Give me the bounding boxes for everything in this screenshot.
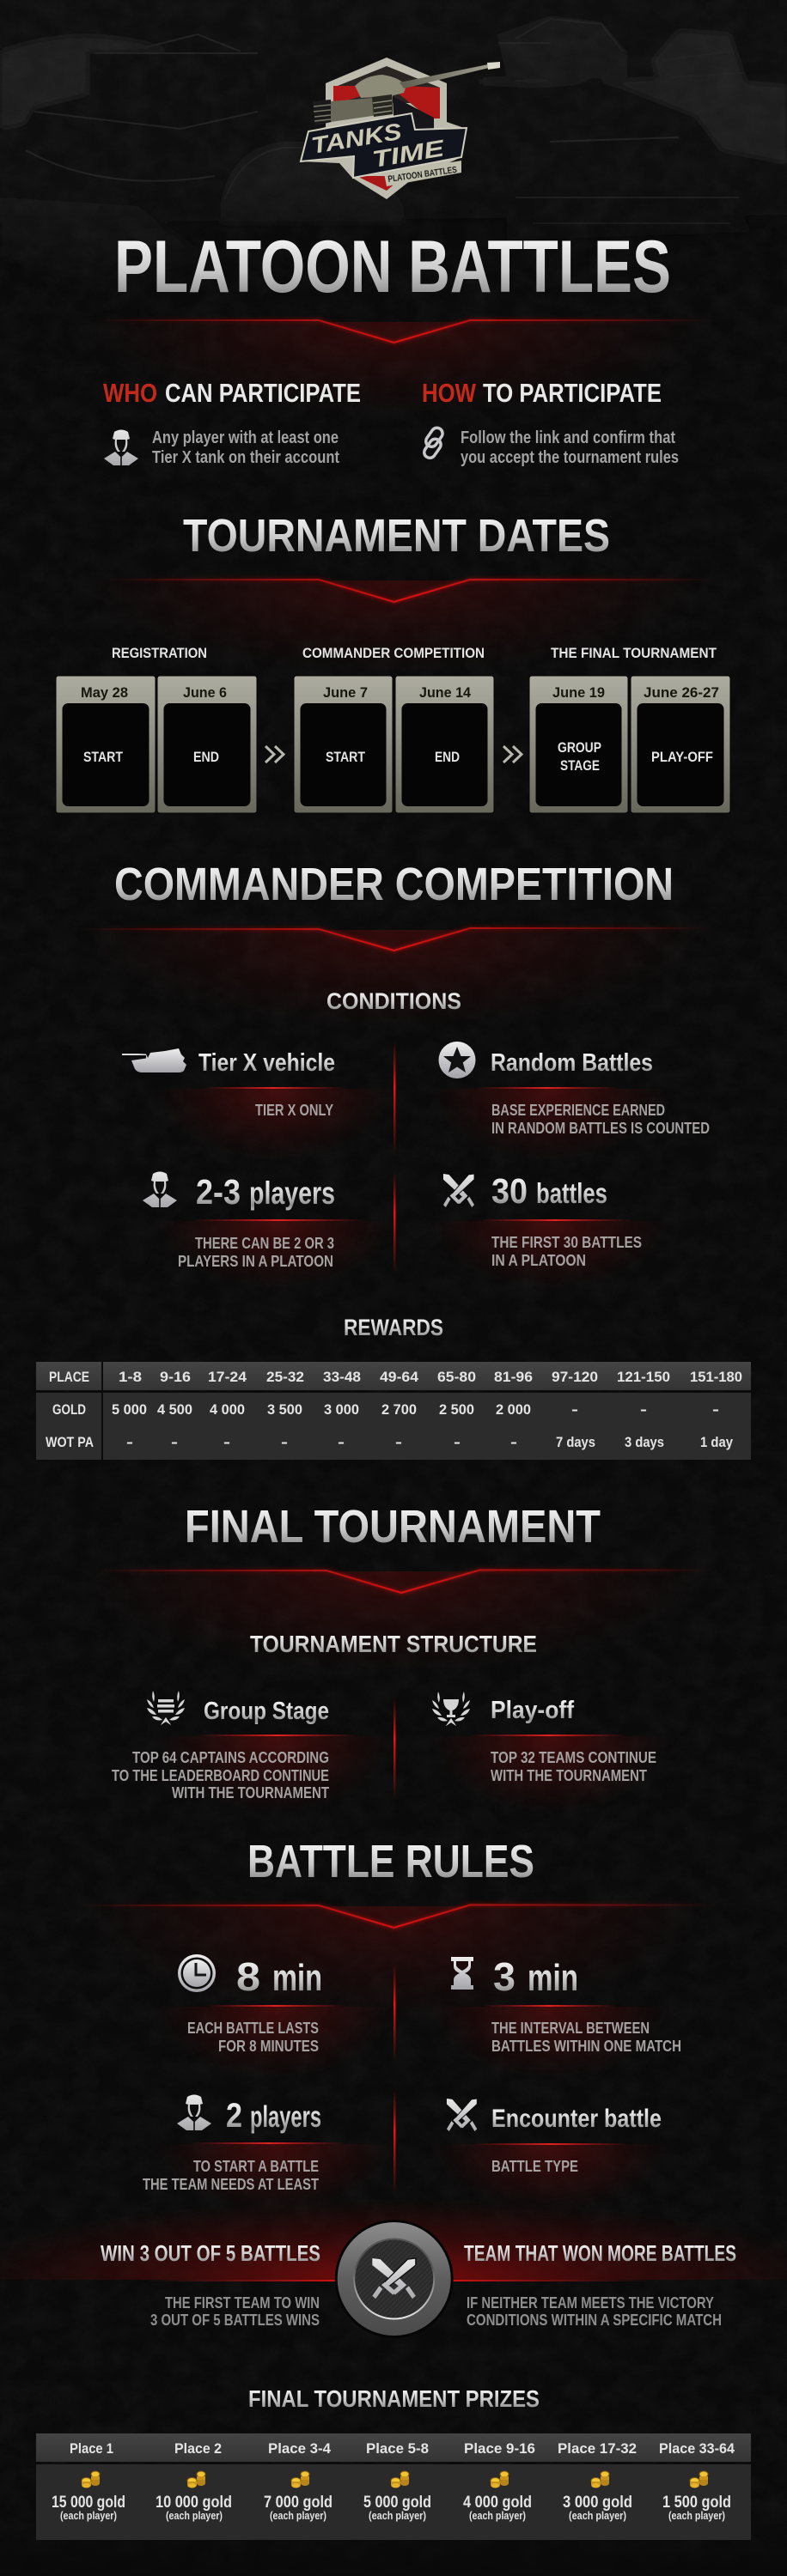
table header: Place 5-8	[366, 2440, 429, 2457]
description: THE FIRST 30 BATTLES	[491, 1234, 642, 1251]
description: BATTLES WITHIN ONE MATCH	[491, 2038, 681, 2055]
heading: Random Battles	[491, 1049, 653, 1077]
card: June 6 end: END	[193, 749, 219, 765]
table row: place: 81-96	[494, 1369, 533, 1385]
table row: wot pa: -	[338, 1434, 345, 1450]
heading: 3	[493, 1954, 516, 1999]
card: May 28 start: May 28	[81, 684, 128, 701]
heading: 30	[491, 1171, 528, 1211]
heading: tournament dates: TOURNAMENT DATES	[183, 510, 610, 562]
table row: place: 121-150	[617, 1369, 670, 1385]
prize: place 17-32: 3 000 gold	[563, 2494, 632, 2512]
heading	[226, 2097, 321, 2135]
vertical divider: tournament structure	[394, 1698, 395, 1801]
description: FOR 8 MINUTES	[218, 2038, 319, 2055]
vertical divider: battle rules row 1	[394, 1965, 395, 2063]
heading: min	[528, 1957, 578, 1999]
table row: gold: 5 000	[112, 1401, 147, 1418]
prize: place 9-16	[463, 2471, 532, 2522]
card: June 7 start: START	[326, 749, 366, 765]
description	[491, 1234, 642, 1269]
description: TO THE LEADERBOARD CONTINUE	[112, 1767, 329, 1784]
table row: place: 49-64	[380, 1369, 419, 1385]
prize: place 3-4: 7 000 gold	[264, 2494, 332, 2512]
table row: wot pa: -	[454, 1434, 461, 1450]
table row: place: 25-32	[266, 1369, 304, 1385]
icon: players	[143, 1171, 177, 1207]
condition: Tier X vehicle	[122, 1048, 346, 1119]
subheading: conditions: CONDITIONS	[326, 988, 461, 1014]
prize: place 2	[156, 2471, 232, 2522]
table row: wot pa	[46, 1434, 733, 1450]
table row: place	[49, 1369, 742, 1385]
description	[143, 2158, 319, 2193]
logo plate	[384, 161, 461, 186]
heading: final tournament: FINAL TOURNAMENT	[185, 1501, 601, 1552]
label: registration: REGISTRATION	[112, 645, 207, 661]
icon: hourglass	[451, 1957, 473, 1990]
heading: players	[249, 1176, 335, 1211]
table row: place: 33-48	[323, 1369, 361, 1385]
card: June 19 group stage: STAGE	[560, 757, 600, 774]
stage: group stage	[112, 1691, 359, 1801]
victory: win 3 out of 5	[101, 2240, 320, 2329]
icon: link	[422, 426, 445, 460]
divider: final tournament	[95, 1570, 712, 1593]
table header: Place 3-4	[268, 2440, 332, 2457]
table row: gold: -	[640, 1401, 647, 1418]
description: CONDITIONS WITHIN A SPECIFIC MATCH	[467, 2312, 722, 2329]
divider: battle rules	[80, 1905, 717, 1928]
description	[150, 2294, 320, 2329]
table: rewards	[36, 1362, 751, 1460]
icon: players	[177, 2095, 211, 2130]
card: June 26-27 play-off	[631, 676, 730, 813]
table header: Place 17-32	[558, 2440, 637, 2457]
card: May 28 start: START	[83, 749, 124, 765]
subheading: rewards: REWARDS	[344, 1315, 443, 1340]
heading: min	[272, 1957, 322, 1999]
table row: gold: 4 500	[157, 1401, 192, 1418]
description: THE TEAM NEEDS AT LEAST	[143, 2176, 319, 2193]
prize: place 2: (each player)	[166, 2509, 223, 2522]
table row: place: 97-120	[552, 1369, 598, 1385]
prize: place 5-8: 5 000 gold	[363, 2494, 431, 2512]
table row: wot pa: 1 day	[700, 1434, 733, 1450]
arrow: registration to commander competition	[265, 746, 284, 762]
table row: place: PLACE	[49, 1369, 89, 1385]
table header: Place 2	[174, 2440, 222, 2457]
table row: place: 9-16	[160, 1369, 191, 1385]
prize: place 33-64: (each player)	[668, 2509, 725, 2522]
text: who: Tier X tank on their account	[152, 448, 339, 467]
card: June 19 group stage: June 19	[552, 684, 605, 701]
table row: wot pa: -	[223, 1434, 230, 1450]
card: May 28 start	[56, 676, 156, 813]
prize: place 5-8	[363, 2471, 431, 2522]
table row: wot pa: -	[395, 1434, 402, 1450]
heading: who can participate	[103, 378, 361, 408]
card: June 26-27 play-off: June 26-27	[644, 684, 719, 701]
prize: place 1: 15 000 gold	[52, 2494, 125, 2512]
description: THE FIRST TEAM TO WIN	[165, 2294, 320, 2312]
table row: place: 17-24	[208, 1369, 247, 1385]
divider: commander competition	[80, 928, 712, 951]
table row: wot pa: -	[510, 1434, 517, 1450]
description: 3 OUT OF 5 BATTLES WINS	[150, 2312, 320, 2329]
table row: place: 1-8	[119, 1369, 142, 1385]
table header	[70, 2440, 735, 2457]
table row: gold: GOLD	[52, 1401, 86, 1418]
icon: group stage laurel	[147, 1691, 185, 1725]
table row: wot pa: -	[281, 1434, 288, 1450]
vertical divider: conditions row 1	[394, 1041, 395, 1157]
rule: 2 players	[143, 2095, 346, 2193]
description	[467, 2294, 722, 2329]
description: PLAYERS IN A PLATOON	[178, 1253, 333, 1270]
rule: 8 min	[178, 1954, 346, 2055]
table header: Place 33-64	[659, 2440, 735, 2457]
card: June 7 start	[294, 676, 393, 813]
heading: WIN 3 OUT OF 5 BATTLES	[101, 2240, 320, 2266]
description: IF NEITHER TEAM MEETS THE VICTORY	[467, 2294, 714, 2312]
description: THERE CAN BE 2 OR 3	[195, 1235, 334, 1252]
rule: encounter battle	[447, 2099, 662, 2175]
table row: gold: -	[712, 1401, 719, 1418]
prize: place 33-64: 1 500 gold	[662, 2494, 731, 2512]
heading: 8	[236, 1954, 260, 1999]
table row: place: 151-180	[690, 1369, 742, 1385]
description: THE INTERVAL BETWEEN	[491, 2020, 650, 2037]
icon: clock	[178, 1954, 216, 1992]
divider: title	[95, 320, 712, 343]
heading: Encounter battle	[491, 2105, 662, 2133]
description	[187, 2020, 319, 2055]
description	[178, 1235, 334, 1270]
prize: place 17-32: (each player)	[569, 2509, 626, 2522]
icon: crossed swords	[447, 2099, 477, 2131]
prize: place 1: (each player)	[60, 2509, 117, 2522]
table row: gold: -	[571, 1401, 578, 1418]
logo text TANKS: TANKS	[309, 118, 404, 159]
table row: place: 65-80	[437, 1369, 476, 1385]
card: June 19 group stage: GROUP	[558, 739, 601, 756]
description: BASE EXPERIENCE EARNED	[491, 1102, 665, 1119]
description: BATTLE TYPE	[491, 2158, 578, 2175]
logo subtitle: PLATOON BATTLES	[387, 165, 458, 185]
heading	[491, 1171, 607, 1211]
heading: battles	[536, 1177, 607, 1209]
table header: Place 9-16	[464, 2440, 535, 2457]
victory: team that won more battles	[464, 2240, 736, 2329]
text: how: Follow the link and confirm that	[461, 428, 675, 447]
description	[491, 1749, 656, 1784]
prize: place 33-64	[662, 2471, 731, 2522]
label: the final tournament: THE FINAL TOURNAMENT	[551, 645, 717, 661]
description: TIER X ONLY	[255, 1102, 333, 1119]
heading: commander competition: COMMANDER COMPETITION	[114, 859, 674, 910]
prize: place 5-8: (each player)	[369, 2509, 426, 2522]
card: June 7 start: June 7	[323, 684, 368, 701]
table row: gold	[52, 1401, 719, 1418]
icon: player	[104, 429, 138, 465]
heading: how to participate	[422, 378, 662, 408]
table: final tournament prizes	[36, 2433, 751, 2540]
card: June 6 end	[157, 676, 257, 813]
description: IN A PLATOON	[491, 1252, 586, 1269]
heading: how to participate: HOW	[422, 378, 477, 408]
label: commander competition: COMMANDER COMPETITION	[302, 645, 485, 661]
condition: Random Battles	[438, 1042, 710, 1137]
badge: crossed swords	[335, 2220, 454, 2338]
text: how	[461, 428, 679, 467]
table row: gold: 2 500	[439, 1401, 474, 1418]
table header: Place 1	[70, 2440, 113, 2457]
description: WITH THE TOURNAMENT	[172, 1784, 329, 1801]
subheading: tournament structure: TOURNAMENT STRUCTURE	[250, 1631, 537, 1657]
card: June 14 end: June 14	[419, 684, 472, 701]
condition: 30 battles	[443, 1171, 642, 1269]
red glow: header sections	[77, 322, 710, 2281]
heading	[196, 1172, 335, 1212]
table row: gold: 2 000	[496, 1401, 531, 1418]
logo: Tanks Time Platoon Battles	[301, 58, 500, 199]
description: TO START A BATTLE	[193, 2158, 319, 2175]
description	[112, 1749, 329, 1801]
heading: how to participate: TO PARTICIPATE	[483, 378, 662, 408]
heading	[236, 1954, 322, 1999]
description: TOP 32 TEAMS CONTINUE	[491, 1749, 656, 1766]
heading: Group Stage	[204, 1698, 329, 1725]
logo tank	[393, 96, 434, 131]
rule: 3 min	[451, 1954, 681, 2055]
heading: 2	[226, 2097, 242, 2135]
table row: gold: 3 000	[324, 1401, 359, 1418]
logo shield	[301, 58, 467, 199]
background battlefield scene with tanks	[0, 0, 787, 283]
description	[491, 1102, 710, 1137]
heading: 2-3	[196, 1172, 241, 1212]
prize: place 9-16: 4 000 gold	[463, 2494, 532, 2512]
icon: crossed swords	[443, 1174, 474, 1207]
prize: place 3-4: (each player)	[270, 2509, 326, 2522]
text: how: you accept the tournament rules	[461, 448, 679, 467]
description	[491, 2020, 681, 2055]
stage: play-off	[432, 1692, 656, 1784]
heading: who can participate: WHO	[103, 378, 157, 408]
text: who	[152, 428, 339, 467]
heading: Play-off	[491, 1697, 574, 1724]
condition: 2-3 players	[143, 1171, 366, 1270]
prize: place 17-32	[563, 2471, 632, 2522]
background tank details	[26, 19, 743, 223]
table row: gold: 3 500	[267, 1401, 302, 1418]
table row: wot pa: 3 days	[625, 1434, 664, 1450]
icon: play-off laurel and trophy	[432, 1692, 470, 1726]
prize: place 2: 10 000 gold	[156, 2494, 232, 2512]
card: June 14 end: END	[435, 749, 460, 765]
card: June 14 end	[395, 676, 494, 813]
heading: Tier X vehicle	[198, 1049, 335, 1077]
description: EACH BATTLE LASTS	[187, 2020, 319, 2037]
heading: players	[250, 2100, 321, 2134]
logo banner	[301, 113, 467, 178]
table row: wot pa: WOT PA	[46, 1434, 94, 1450]
heading: battle rules: BATTLE RULES	[247, 1836, 534, 1887]
prize: place 1	[52, 2471, 125, 2522]
heading: who can participate: CAN PARTICIPATE	[165, 378, 361, 408]
vertical divider: conditions row 2	[394, 1172, 395, 1273]
arrow: commander competition to final tournament	[503, 746, 522, 762]
table row: wot pa: -	[126, 1434, 133, 1450]
table row: wot pa: -	[171, 1434, 178, 1450]
description: TOP 64 CAPTAINS ACCORDING	[132, 1749, 329, 1766]
card: June 26-27 play-off: PLAY-OFF	[651, 749, 713, 765]
table row: gold: 2 700	[381, 1401, 417, 1418]
icon: star	[438, 1042, 476, 1078]
icon: tank	[122, 1048, 186, 1072]
vertical divider: battle rules row 2	[394, 2089, 395, 2194]
prize: place 3-4	[264, 2471, 332, 2522]
card: June 19 group stage	[529, 676, 628, 813]
red band behind victory conditions	[0, 2117, 787, 2281]
prize: place 9-16: (each player)	[469, 2509, 526, 2522]
divider: tournament dates	[107, 580, 712, 602]
card: June 6 end: June 6	[183, 684, 227, 701]
table row: wot pa: 7 days	[556, 1434, 595, 1450]
subheading: final tournament prizes: FINAL TOURNAMENT PRIZES	[248, 2385, 540, 2412]
table row: gold: 4 000	[210, 1401, 245, 1418]
description: IN RANDOM BATTLES IS COUNTED	[491, 1120, 710, 1137]
heading	[493, 1954, 578, 1999]
description: WITH THE TOURNAMENT	[491, 1767, 647, 1784]
logo text TIME: TIME	[370, 135, 447, 173]
text: who: Any player with at least one	[152, 428, 339, 447]
